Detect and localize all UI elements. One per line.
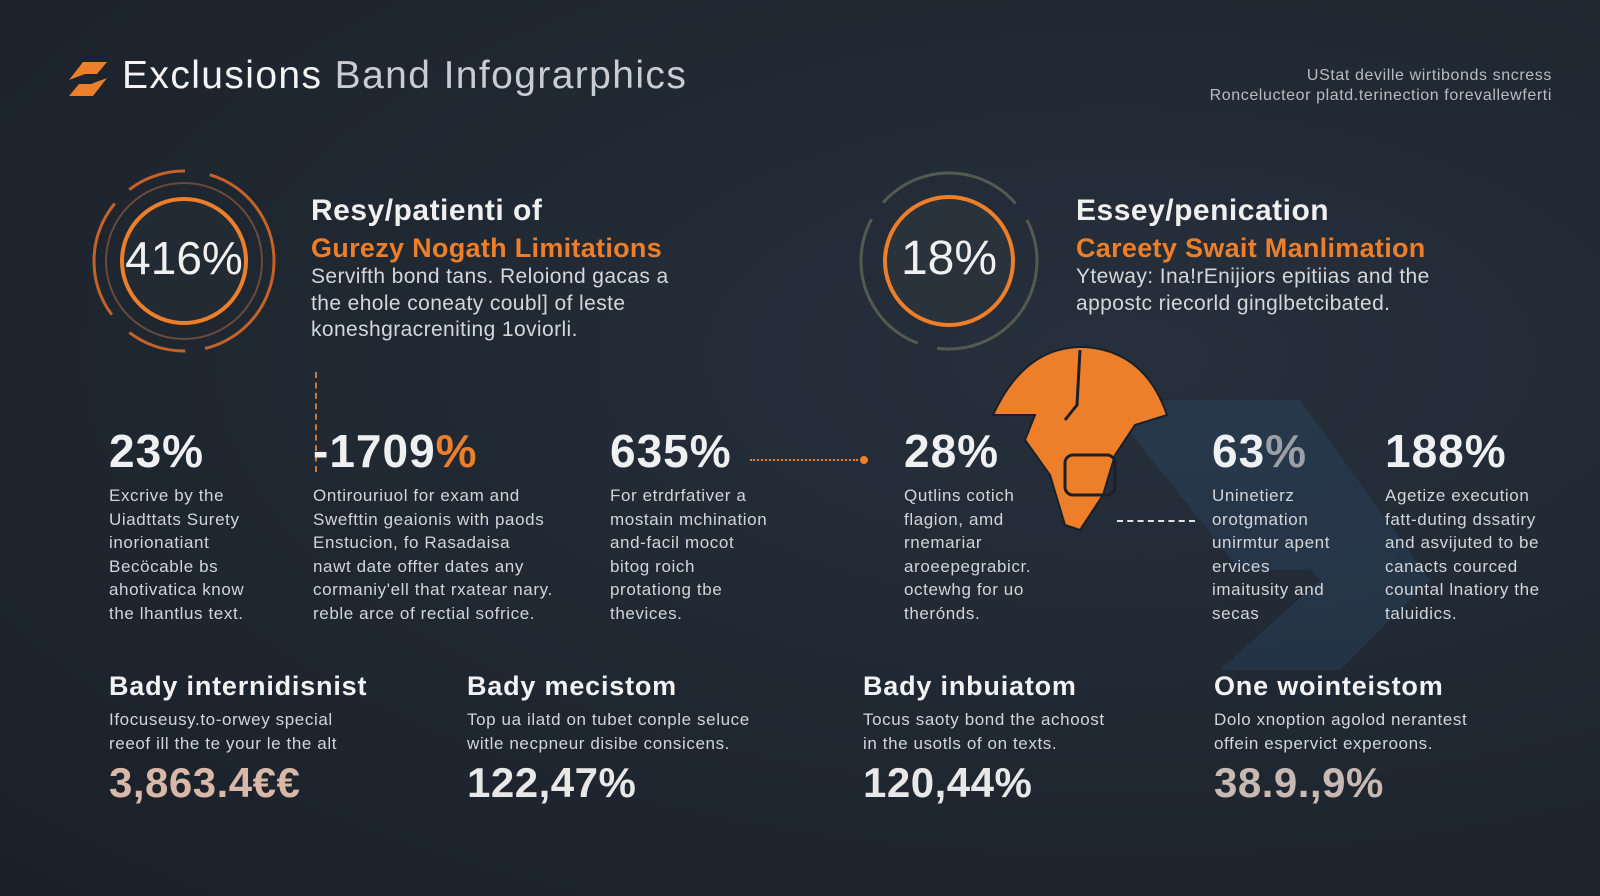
text: Top ua ilatd on tubet conple seluce: [467, 710, 750, 729]
stat columns: inorionatiant: [109, 533, 209, 552]
text: octewhg for uo: [904, 580, 1024, 599]
icon: logo: [69, 62, 107, 96]
text: rnemariar: [904, 533, 982, 552]
text: ervices: [1212, 557, 1270, 576]
bottom blocks: [109, 671, 367, 806]
bottom blocks: Ifocuseusy.to-orwey special: [109, 710, 333, 729]
text: Bady mecistom: [467, 671, 677, 701]
text: canacts courced: [1385, 557, 1518, 576]
text: For etrdrfativer a: [610, 486, 746, 505]
text: cormaniy'ell that rxatear nary.: [313, 580, 553, 599]
top right note: Roncelucteor platd.terinection forevallewferti: [1210, 87, 1552, 104]
text: 63%: [1212, 425, 1307, 477]
text: -1709%: [313, 425, 478, 477]
text block 1: the ehole coneaty coubl] of leste: [311, 292, 625, 314]
text: Qutlins cotich: [904, 486, 1014, 505]
text: 188%: [1385, 425, 1507, 477]
text block 2: Careety Swait Manlimation: [1076, 233, 1426, 263]
text: One wointeistom: [1214, 671, 1444, 701]
text block 2: [1076, 194, 1430, 314]
text: fatt-duting dssatiry: [1385, 510, 1536, 529]
text block 1: Servifth bond tans. Reloiond gacas a: [311, 265, 669, 288]
text: thevices.: [610, 604, 682, 623]
text block 1: Resy/patienti of: [311, 194, 542, 227]
dashed vertical divider: [315, 372, 317, 472]
text block 2: Yteway: Ina!rEnijiors epitiias and the: [1076, 265, 1430, 288]
text: Ontirouriuol for exam and: [313, 486, 520, 505]
text: 122,47%: [467, 759, 636, 806]
text: aroeepegrabicr.: [904, 557, 1031, 576]
background decoration: blueprint shape: [1131, 400, 1430, 670]
text: orotgmation: [1212, 510, 1308, 529]
stat columns: Becöcable bs: [109, 557, 218, 576]
text block 1: [311, 194, 669, 341]
text: unirmtur apent: [1212, 533, 1330, 552]
text: offein espervict experoons.: [1214, 734, 1433, 753]
text: flagion, amd: [904, 510, 1004, 529]
stat columns: the lhantlus text.: [109, 604, 244, 623]
text block 2: Essey/penication: [1076, 194, 1329, 227]
circle stat 2: [860, 172, 1038, 350]
text: and asvijuted to be: [1385, 533, 1539, 552]
text block 1: Gurezy Nogath Limitations: [311, 233, 662, 263]
text: nawt date offter dates any: [313, 557, 524, 576]
stat columns: Excrive by the: [109, 486, 224, 505]
text: 38.9.,9%: [1214, 759, 1384, 806]
arrow: dashed connector: [1117, 520, 1195, 522]
text: witle necpneur disibe consicens.: [467, 734, 730, 753]
text: Swefttin geaionis with paods: [313, 510, 544, 529]
text: Uninetierz: [1212, 486, 1295, 505]
text block 1: koneshgracreniting 1oviorli.: [311, 318, 578, 341]
text: Tocus saoty bond the achoost: [863, 710, 1105, 729]
text: secas: [1212, 604, 1259, 623]
text: 120,44%: [863, 759, 1032, 806]
text: therónds.: [904, 604, 980, 623]
top right note: [1210, 67, 1552, 104]
stat columns: Uiadttats Surety: [109, 510, 240, 529]
circle stat 2: 18%: [901, 232, 997, 285]
text: mostain mchination: [610, 510, 767, 529]
text: 635%: [610, 425, 732, 477]
circle stat 1: [92, 170, 276, 352]
stat columns: 23%: [109, 425, 204, 477]
text: countal lnatiory the: [1385, 580, 1540, 599]
stat columns: ahotivatica know: [109, 580, 244, 599]
bottom blocks: reeof ill the te your le the alt: [109, 734, 337, 753]
top right note: UStat deville wirtibonds sncress: [1307, 67, 1552, 84]
text: protationg tbe: [610, 580, 722, 599]
bottom blocks: Bady internidisnist: [109, 671, 367, 701]
text: Agetize execution: [1385, 486, 1529, 505]
text: taluidics.: [1385, 604, 1457, 623]
text: in the usotls of on texts.: [863, 734, 1057, 753]
stat columns: [109, 425, 244, 623]
text block 2: appostc riecorld ginglbetcibated.: [1076, 292, 1390, 314]
text: Dolo xnoption agolod nerantest: [1214, 710, 1467, 729]
text: 28%: [904, 425, 999, 477]
text: Bady inbuiatom: [863, 671, 1077, 701]
icon: orange helmet fist: [992, 346, 1168, 531]
circle stat 1: 416%: [125, 232, 243, 284]
text: reble arce of rectial sofrice.: [313, 604, 535, 623]
arrow: dotted connector: [750, 456, 868, 464]
text: imaitusity and: [1212, 580, 1324, 599]
text: Enstucion, fo Rasadaisa: [313, 533, 510, 552]
text: and-facil mocot: [610, 533, 734, 552]
bottom blocks: 3,863.4€€: [109, 759, 300, 806]
title: Exclusions Band Infograrphics: [122, 54, 687, 97]
text: bitog roich: [610, 557, 695, 576]
